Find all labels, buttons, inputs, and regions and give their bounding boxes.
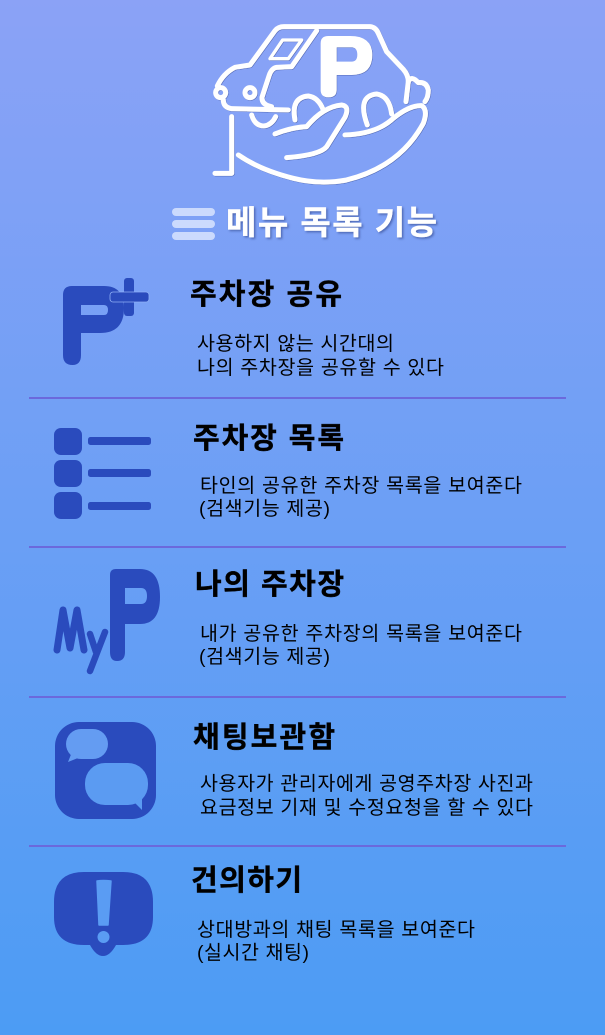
heading: 건의하기 xyxy=(191,864,302,897)
heading: 채팅보관함 xyxy=(193,721,335,754)
description: (실시간 채팅) xyxy=(197,942,309,964)
icon: chat bubbles xyxy=(55,722,156,819)
icon: exclamation bubble xyxy=(54,872,153,956)
description: 상대방과의 채팅 목록을 보여준다 xyxy=(197,919,475,941)
panel: parking list xyxy=(54,422,522,520)
title: 메뉴 목록 기능 xyxy=(226,204,437,241)
icon: My P xyxy=(57,569,160,671)
icon: list xyxy=(54,428,151,519)
heading: 주차장 목록 xyxy=(193,422,344,455)
icon: menu lines xyxy=(172,208,215,240)
description: 사용자가 관리자에게 공영주차장 사진과 xyxy=(200,773,533,795)
description: 요금정보 기재 및 수정요청을 할 수 있다 xyxy=(200,797,533,819)
description: 내가 공유한 주차장의 목록을 보여준다 xyxy=(200,623,522,645)
description: (검색기능 제공) xyxy=(199,498,330,520)
description: 타인의 공유한 주차장 목록을 보여준다 xyxy=(200,475,522,497)
panel: chat storage xyxy=(55,721,533,819)
heading: 나의 주차장 xyxy=(195,568,344,601)
heading: 주차장 공유 xyxy=(190,278,342,311)
icon: P plus xyxy=(63,278,149,365)
icon: car parked in a hand logo xyxy=(215,27,428,182)
description: 나의 주차장을 공유할 수 있다 xyxy=(197,357,444,379)
panel: suggestion xyxy=(54,864,475,964)
description: (검색기능 제공) xyxy=(199,646,330,668)
panel: my parking xyxy=(57,568,522,671)
panel: parking share xyxy=(63,278,444,379)
description: 사용하지 않는 시간대의 xyxy=(197,333,394,355)
